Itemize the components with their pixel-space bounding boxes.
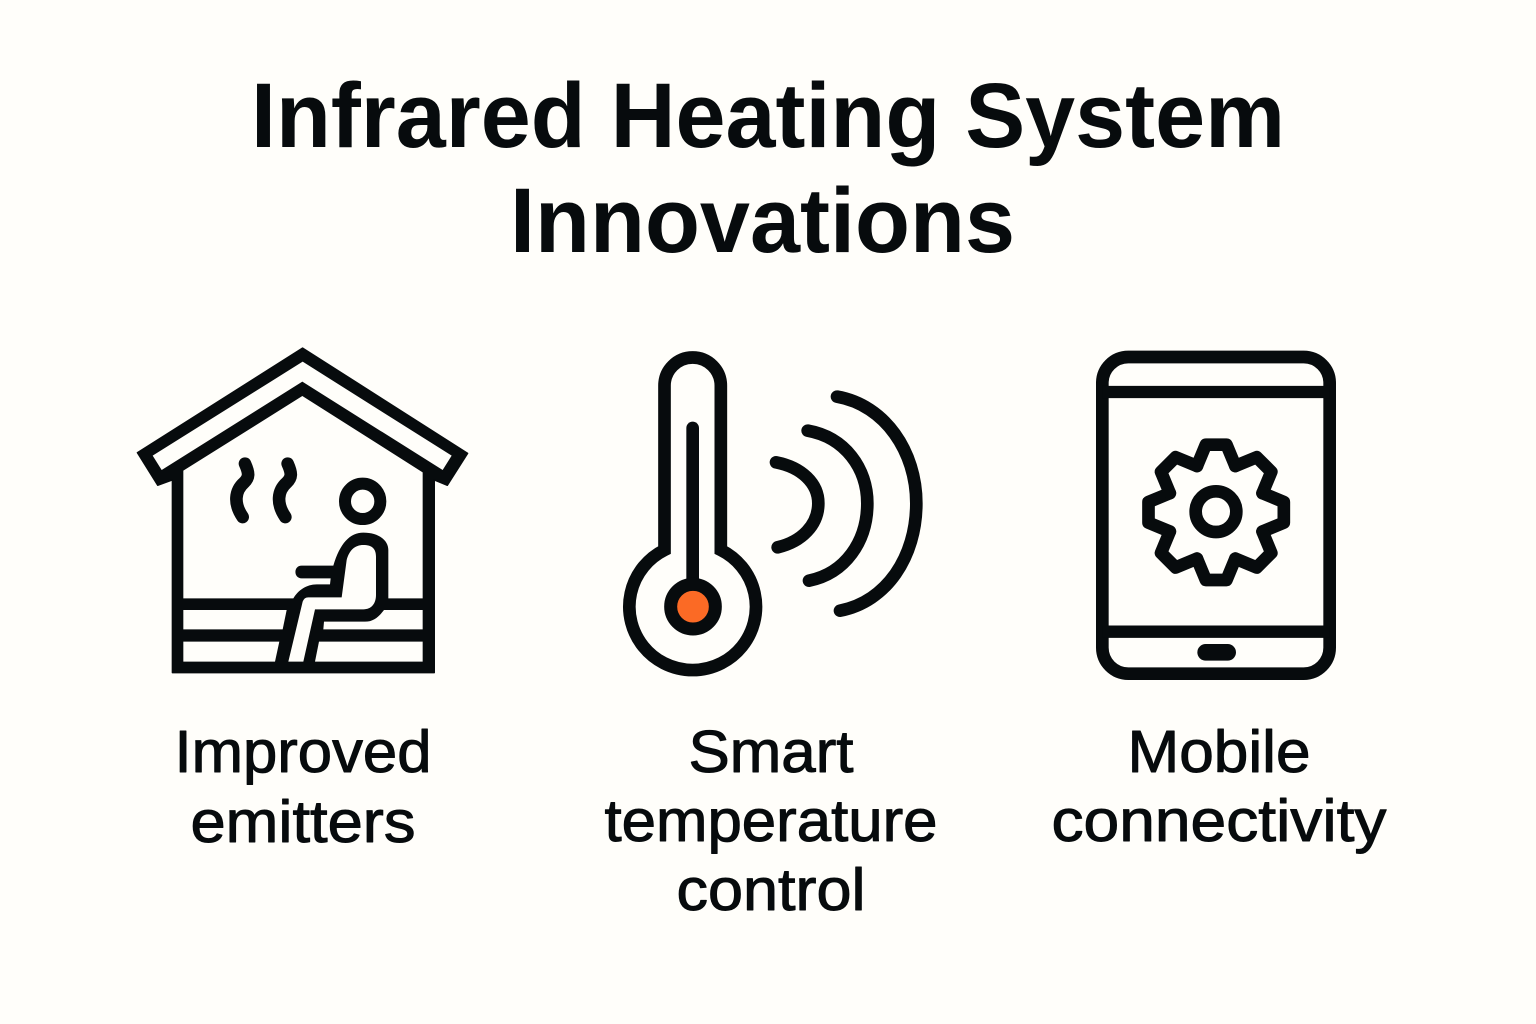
label: smart temperature control [604,719,938,923]
label: mobile connectivity [1052,719,1387,854]
label: smart temperature control: control [676,857,866,923]
title: Infrared Heating System [251,65,1285,167]
thermometer bulb [671,584,715,629]
home button [1197,644,1236,661]
house silhouette [137,348,468,673]
signal waves [776,397,916,611]
thermometer stem [674,428,712,593]
label: improved emitters: Improved [174,719,432,785]
room interior with person outline [183,396,423,598]
label: smart temperature control: Smart [688,719,854,785]
label: mobile connectivity: Mobile [1128,719,1310,785]
gear [1148,445,1284,580]
thermometer outline [629,357,756,670]
label: smart temperature control: temperature [604,788,938,854]
heat waves [236,464,291,517]
roof strip [153,362,452,470]
tablet bars [1102,392,1330,632]
label: mobile connectivity: connectivity [1052,788,1387,854]
tablet body [1102,357,1330,674]
label: improved emitters [174,719,432,855]
label: improved emitters: emitters [190,789,416,855]
person head [345,484,380,519]
icon: tablet with gear [1102,357,1330,674]
icon: thermometer with signal waves [629,357,916,670]
icon: house with person and heat [137,348,468,673]
bench rows [183,610,423,662]
person torso and leg [288,545,376,662]
title: Innovations [510,170,1015,272]
title [251,65,1285,272]
